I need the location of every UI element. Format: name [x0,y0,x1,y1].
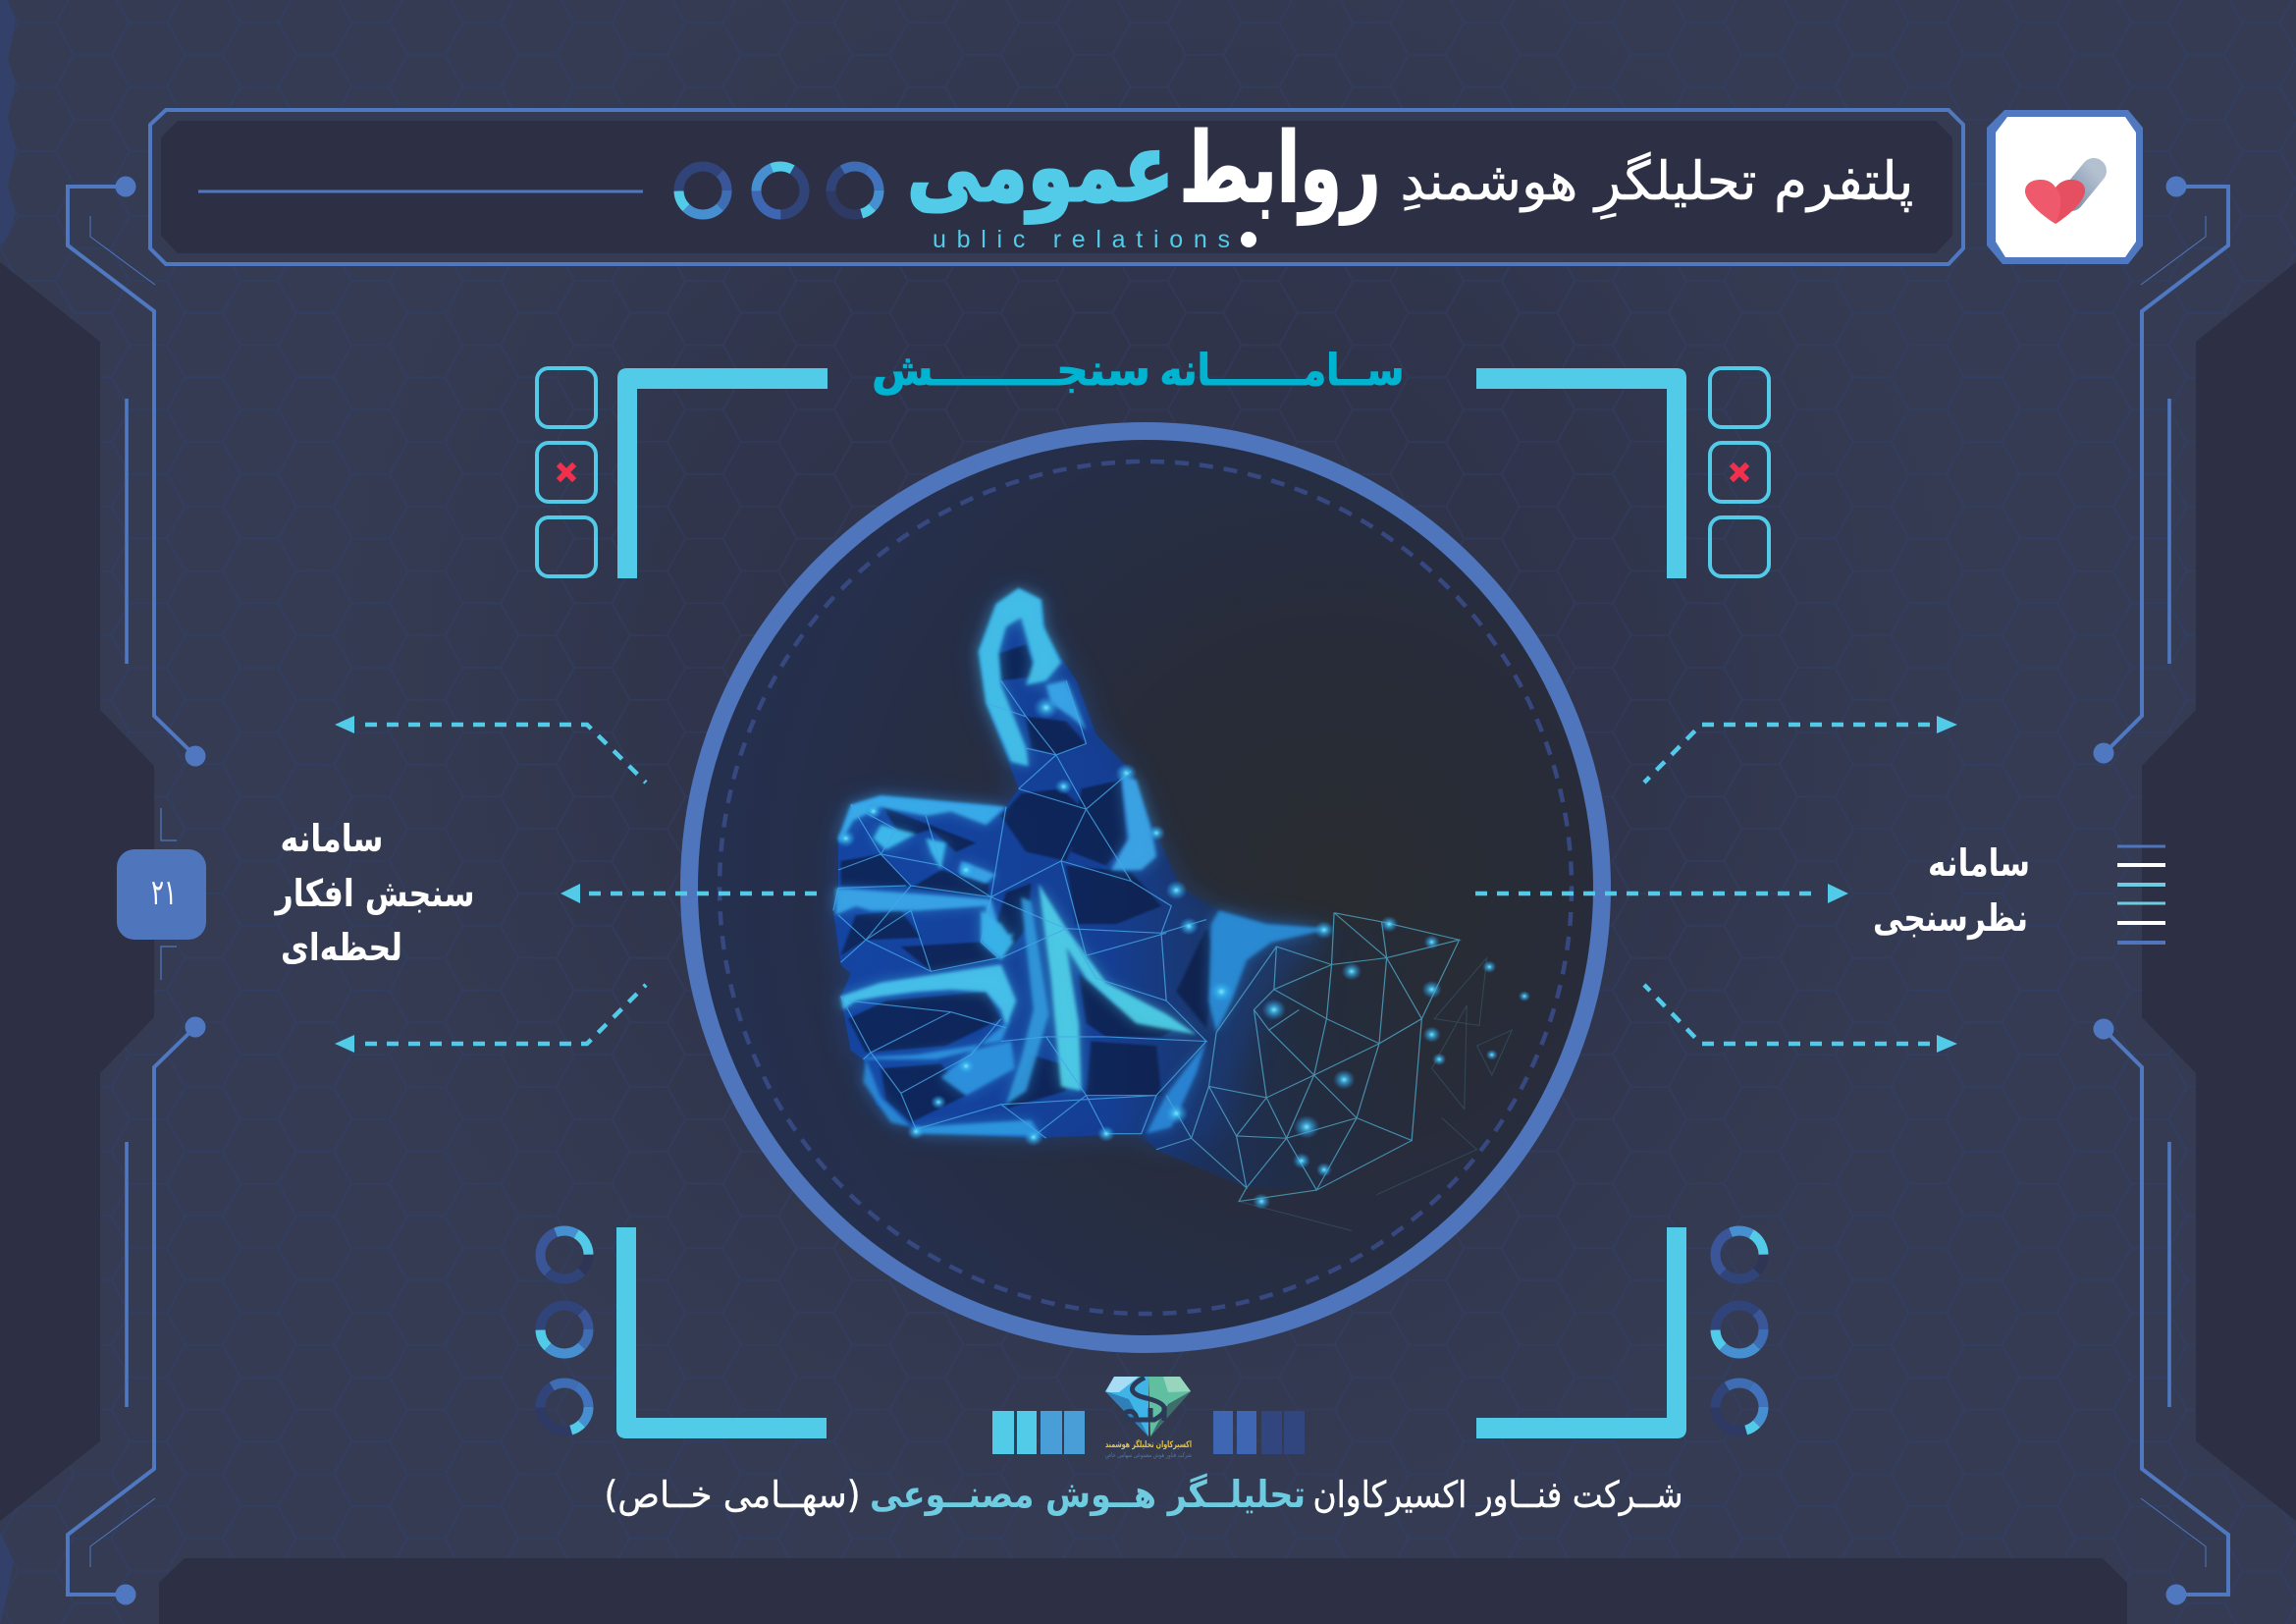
bracket: top right [1476,368,1686,578]
label: right system name [1873,841,2030,940]
banner inner panel [161,121,1952,253]
page number badge: ۲۱ [151,873,177,913]
header title: پلتفرم تحلیلگرِ هوشمندِ [1400,150,1914,220]
bars: bottom right of logo [1213,1411,1305,1454]
label: left system name: سنجش افکار [274,872,475,915]
arrows: left [335,716,820,1053]
footer company name [605,1473,1682,1516]
mesh lines: fading fragments [1239,958,1512,1230]
footer company name: تحلیلــگر هــوش مصنــوعی [870,1473,1306,1516]
logo: public relations: روابط [1180,113,1380,226]
glowing nodes [835,696,1530,1210]
footer company name: شــرکت فنــاور اکسیرکاوان [1313,1474,1682,1516]
section title: ســامـــــــانه [1160,346,1404,396]
corner rings: bottom left [540,1231,589,1432]
bars: bottom left of logo [992,1411,1085,1454]
bracket: bottom left [616,1227,827,1438]
section title [872,346,1404,396]
label: right system name: سامانه [1928,841,2030,885]
label: left system name [274,817,475,969]
checkboxes: right [1710,368,1769,576]
header banner [150,110,1963,264]
footer company name: (سهــامی خــاص) [605,1474,860,1516]
circuit lines: right [2093,177,2228,1604]
central circle [689,431,1602,1344]
label: right system name: نظرسنجی [1873,896,2028,940]
icon: heart and check badge [1987,110,2143,264]
bracket: bottom right [1476,1227,1686,1438]
company logo: diamond [1105,1377,1192,1459]
section title: سنجــــــــش [872,346,1150,396]
label: left system name: سامانه [281,817,383,860]
banner rule [198,190,643,192]
mesh lines: dissolving wrist [1156,913,1460,1202]
logo: public relations [907,113,1380,253]
circuit lines: left [68,177,206,1604]
label: left system name: لحظه‌ای [281,926,402,969]
checkboxes: left [537,368,596,576]
logo: public relations: عمومی [907,113,1174,224]
company logo: diamond: شرکت فناور هوش مصنوعی سهامی خاص [1105,1451,1192,1459]
section title with corner brackets [616,346,1686,1438]
stacked lines: right edge [2117,844,2165,945]
corner rings: bottom right [1716,1231,1763,1432]
arrows: right [1475,716,1957,1053]
company logo: diamond: اکسیرکاوان تحلیلگر هوشمند [1105,1438,1192,1450]
header rings [679,167,880,214]
mesh lines: fingers and palm [833,680,1206,1138]
page number badge [117,849,206,940]
banner frame [150,110,1963,264]
icon: low-poly thumbs up hand [833,588,1530,1230]
logo: public relations: ublic relations [933,226,1230,253]
bracket: top left [617,368,828,578]
